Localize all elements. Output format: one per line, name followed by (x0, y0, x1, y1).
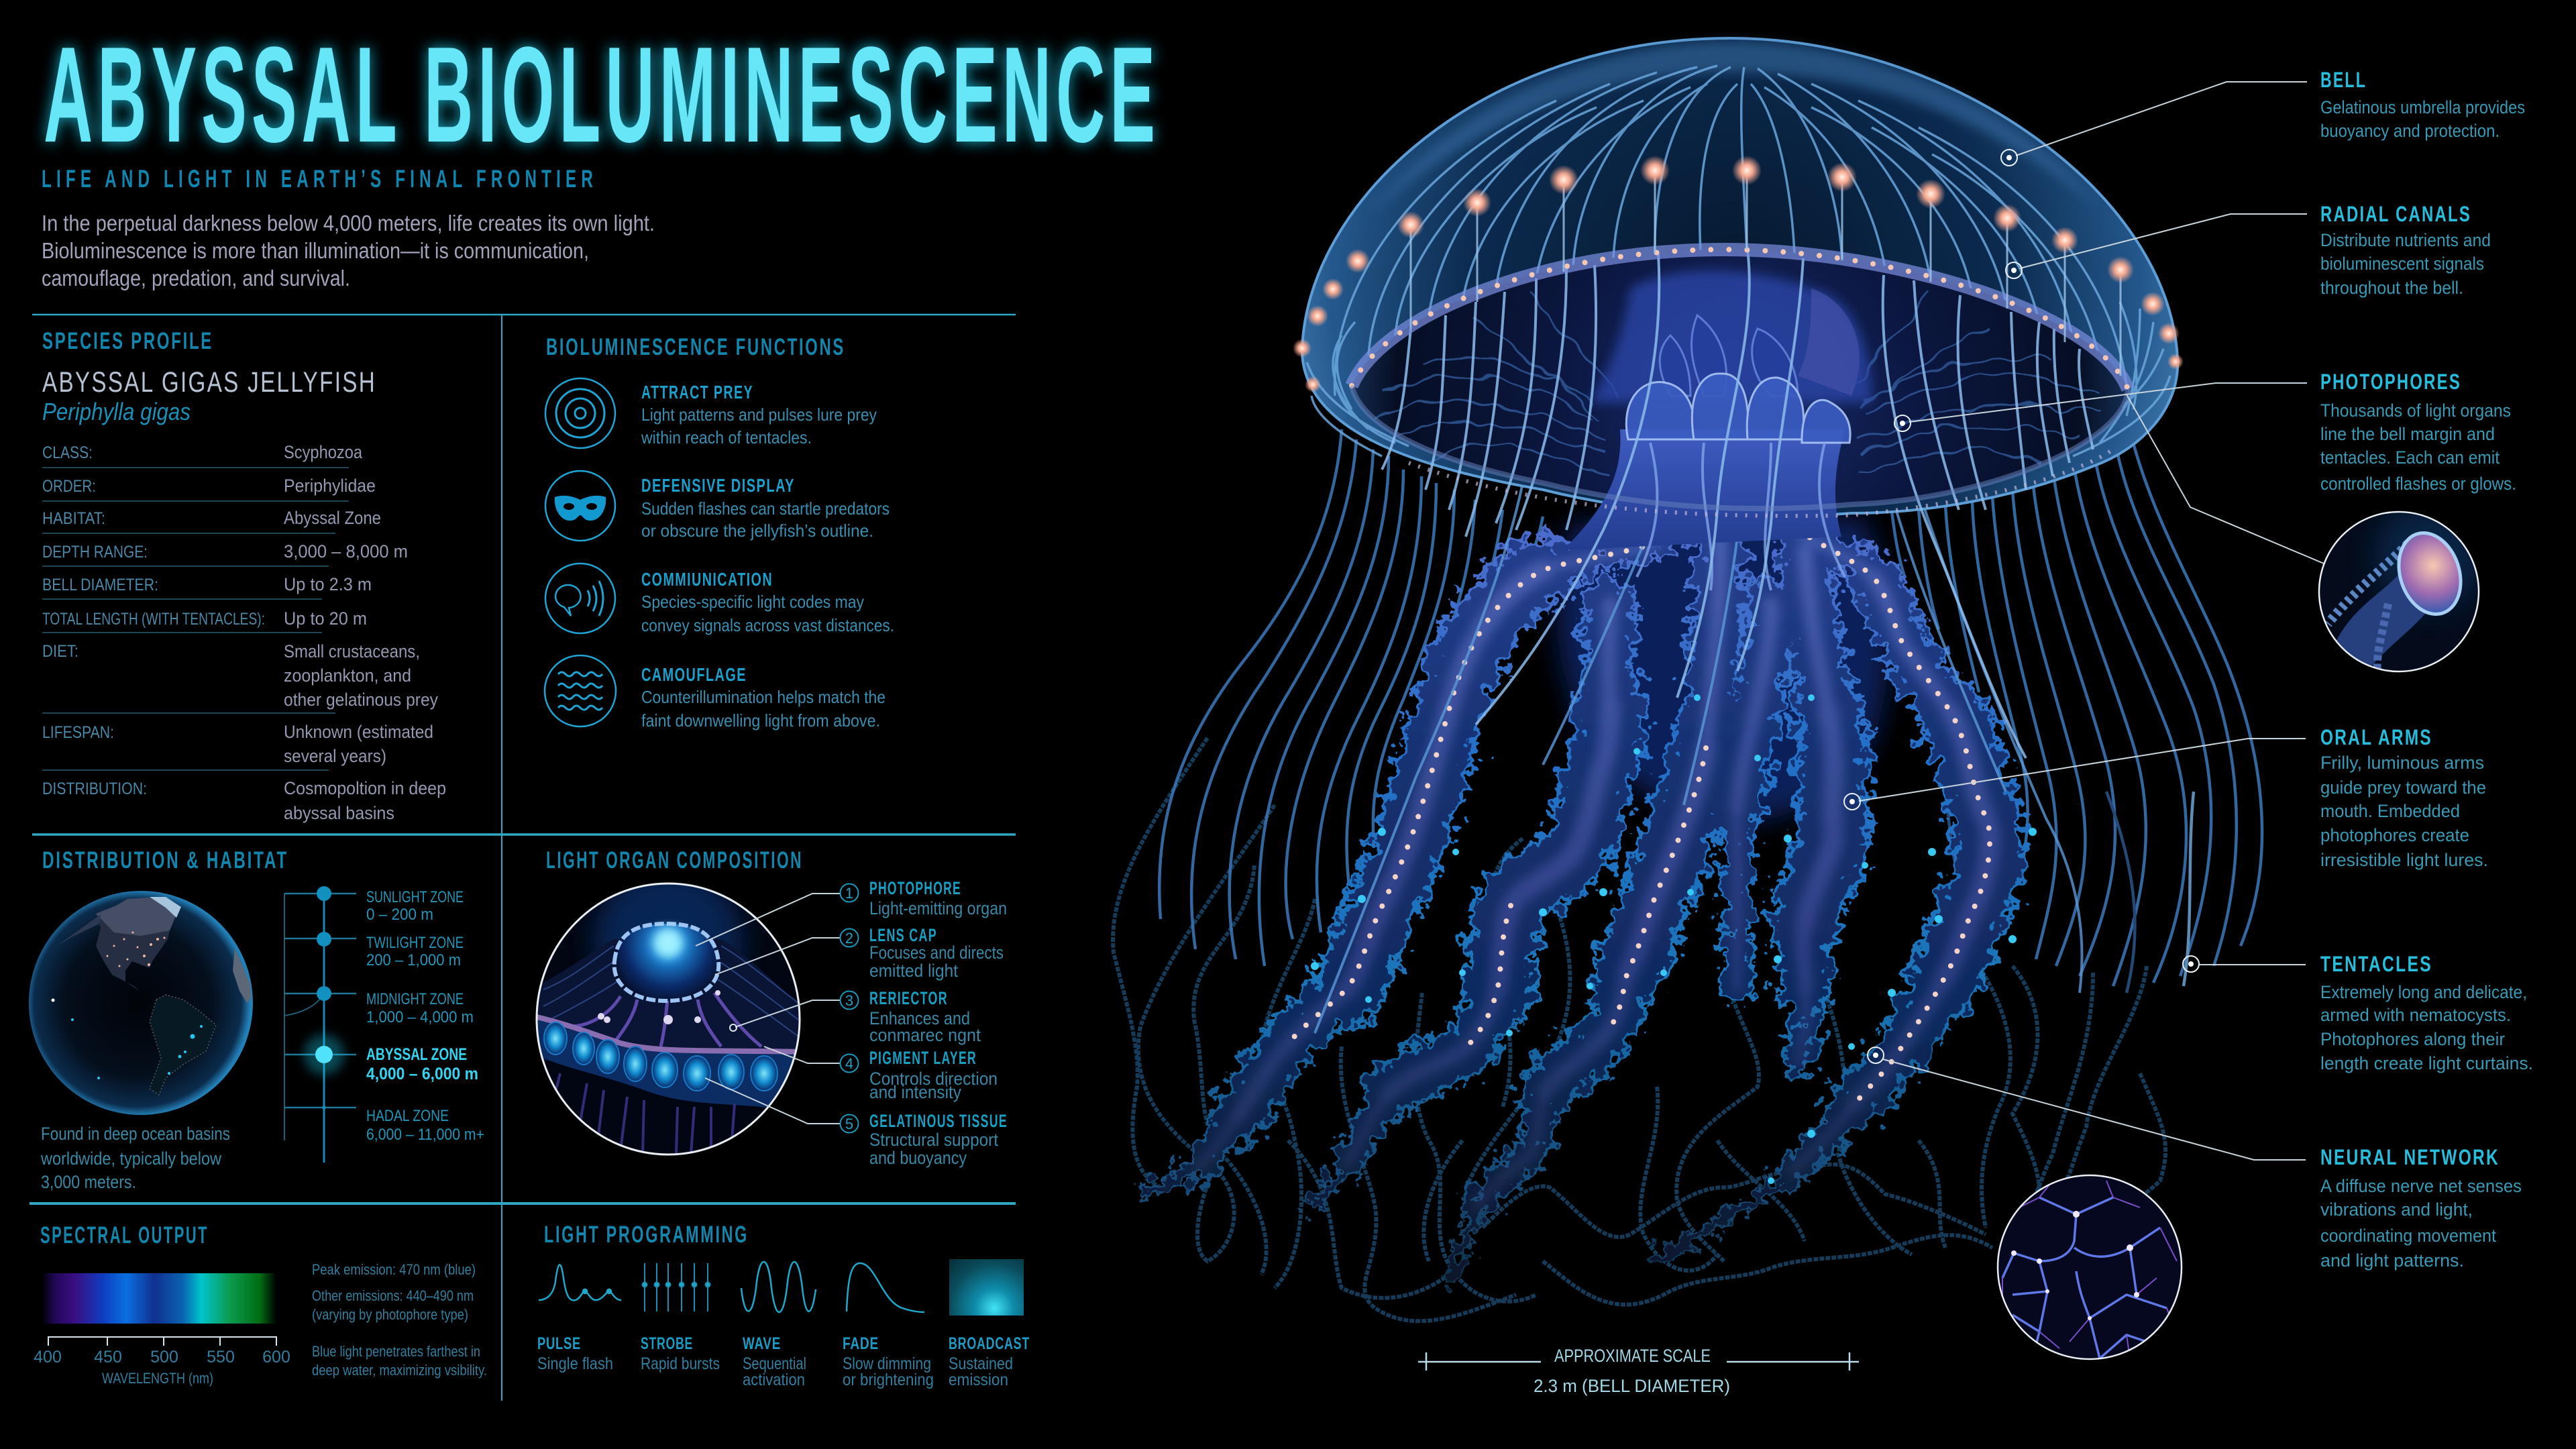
pattern labels: Slow dimming (843, 1354, 931, 1373)
text: attract prey (641, 382, 877, 447)
profile table: TOTAL LENGTH (WITH TENTACLES): (42, 610, 265, 629)
oral arms frill layers (1148, 510, 1990, 1281)
icon: camouflage waves (545, 655, 616, 727)
callout: photophores (1894, 370, 2516, 564)
profile table: BELL DIAMETER: (42, 576, 158, 594)
profile table: DISTRIBUTION: (42, 780, 147, 798)
organ part labels: Controls direction (869, 1069, 998, 1089)
pattern: pulse (539, 1265, 621, 1300)
icon: attract prey (545, 378, 615, 448)
outer tentacles (1159, 416, 2262, 993)
organ callout leaders and numbers: 1 (845, 885, 853, 902)
callout: tentacles: armed with nematocysts. (2320, 1005, 2511, 1025)
text: communication: COMMIUNICATION (641, 569, 773, 590)
pattern labels: Single flash (537, 1354, 613, 1373)
wavelength axis: 600 (262, 1348, 290, 1366)
bell margin ring (1352, 250, 2128, 516)
pattern labels: FADE (843, 1334, 879, 1353)
callout: bell: buoyancy and protection. (2320, 121, 2500, 141)
lower beaded tentacles (1113, 738, 2165, 1321)
depth zone scale: ABYSSAL ZONE (366, 1045, 467, 1064)
callout: radial canals: throughout the bell. (2320, 278, 2463, 298)
depth zone scale (284, 886, 484, 1163)
organ callout leaders and numbers: 3 (845, 992, 853, 1009)
callout: neural network: coordinating movement (2320, 1226, 2496, 1246)
callout: radial canals (2006, 202, 2491, 298)
callout: tentacles (2183, 952, 2533, 1073)
callout: tentacles: Photophores along their (2320, 1029, 2505, 1049)
wavelength axis: 550 (207, 1348, 235, 1366)
text: camouflage (641, 664, 885, 731)
profile table: ORDER: (42, 477, 96, 496)
callout: tentacles: Extremely long and delicate, (2320, 982, 2527, 1002)
intro text: In the perpetual darkness below 4,000 meters, life creates its own light. (42, 211, 655, 235)
organ callout leaders and numbers: 2 (845, 930, 853, 947)
pattern labels (537, 1334, 1030, 1389)
intro text: camouflage, predation, and survival. (42, 266, 350, 290)
bell photophores (1293, 156, 2184, 392)
organ callout leaders and numbers: 5 (845, 1116, 853, 1132)
organ callout leaders and numbers: 4 (845, 1055, 853, 1072)
profile table: Cosmopoltion in deep (284, 778, 446, 798)
wavelength axis: 400 (34, 1348, 62, 1366)
depth zone scale: 1,000 – 4,000 m (366, 1008, 474, 1026)
text: defensive display: or obscure the jellyfish’s outline. (641, 521, 873, 541)
subumbrella (1352, 250, 2128, 508)
organ part labels (869, 878, 1008, 1168)
organ part labels: Structural support (869, 1130, 998, 1150)
callout: oral arms: guide prey toward the (2320, 777, 2486, 798)
callout: neural network: NEURAL NETWORK (2320, 1145, 2500, 1169)
text: attract prey: within reach of tentacles. (641, 427, 812, 447)
scale bar (1418, 1346, 1859, 1396)
heading: light programming: LIGHT PROGRAMMING (544, 1222, 749, 1248)
organ part labels: and intensity (869, 1082, 961, 1102)
depth zone scale: MIDNIGHT ZONE (366, 990, 464, 1008)
spectral notes: Other emissions: 440–490 nm (312, 1287, 474, 1304)
profile table: HABITAT: (42, 509, 105, 528)
pattern labels: BROADCAST (949, 1334, 1030, 1353)
spectrum bar (42, 1273, 276, 1324)
profile table (42, 442, 446, 823)
organ part labels: PHOTOPHORE (869, 878, 961, 898)
organ part labels: GELATINOUS TISSUE (869, 1111, 1008, 1131)
pattern labels: activation (743, 1371, 805, 1389)
profile table: Small crustaceans, (284, 641, 420, 661)
heading: light organ: LIGHT ORGAN COMPOSITION (546, 847, 803, 873)
text: camouflage: Counterillumination helps match the (641, 687, 885, 707)
long hanging tentacles in front of arms (1315, 470, 2082, 1033)
radial canals (1307, 66, 2170, 456)
pattern: broadcast (949, 1259, 1024, 1316)
callout: neural network: A diffuse nerve net senses (2320, 1176, 2522, 1196)
text: ABYSSAL BIOLUMINESCENCE (44, 19, 1160, 171)
organ callout leaders and numbers (696, 884, 859, 1132)
callout: photophores: PHOTOPHORES (2320, 370, 2461, 394)
distribution note: 3,000 meters. (41, 1172, 136, 1192)
spectral notes: (varying by photophore type) (312, 1306, 468, 1323)
callout: bell: Gelatinous umbrella provides (2320, 97, 2525, 117)
pattern: fade (847, 1263, 924, 1312)
profile table: CLASS: (42, 443, 93, 462)
panel: distribution and habitat (29, 847, 484, 1192)
subtitle: LIFE AND LIGHT IN EARTH’S FINAL FRONTIER (42, 165, 598, 193)
callout: oral arms: irresistible light lures. (2320, 850, 2488, 870)
panel: spectral output (34, 1222, 487, 1387)
profile table: Up to 20 m (284, 608, 367, 629)
profile table: other gelatinous prey (284, 690, 438, 710)
spectral notes: Peak emission: 470 nm (blue) (312, 1261, 476, 1278)
pattern labels: WAVE (743, 1334, 781, 1353)
text: attract prey: ATTRACT PREY (641, 382, 753, 402)
heading: functions: BIOLUMINESCENCE FUNCTIONS (546, 334, 845, 360)
distribution note: worldwide, typically below (40, 1148, 221, 1169)
callout: oral arms (1844, 725, 2488, 870)
globe (29, 891, 253, 1115)
icon: defensive display mask (545, 471, 615, 541)
pattern labels: Sustained (949, 1354, 1013, 1373)
pattern labels: Sequential (743, 1354, 806, 1373)
organ part labels: and buoyancy (869, 1148, 967, 1168)
pattern labels: emission (949, 1371, 1008, 1389)
pattern: wave (741, 1262, 816, 1312)
oral arm pearls and glints (1285, 519, 2037, 1184)
callout: tentacles: TENTACLES (2320, 952, 2432, 976)
pattern labels: Rapid bursts (641, 1354, 720, 1373)
text: defensive display: Sudden flashes can startle predators (641, 498, 890, 519)
text: defensive display (641, 475, 890, 541)
callout: oral arms: ORAL ARMS (2320, 725, 2432, 749)
panel: species profile (42, 328, 446, 823)
depth zone scale: 0 – 200 m (366, 906, 433, 924)
profile table: Scyphozoa (284, 442, 363, 462)
text: attract prey: Light patterns and pulses lure prey (641, 405, 877, 425)
profile table: DIET: (42, 642, 78, 661)
callout: neural network (1868, 1047, 2522, 1271)
spectral notes: deep water, maximizing vsibility. (312, 1362, 487, 1379)
species name: ABYSSAL GIGAS JELLYFISH (42, 366, 376, 398)
text: camouflage: CAMOUFLAGE (641, 664, 747, 685)
depth zone scale: 200 – 1,000 m (366, 951, 461, 969)
text: communication: Species-specific light codes may (641, 592, 864, 612)
callout: tentacles: length create light curtains. (2320, 1053, 2533, 1073)
depth zone scale: 6,000 – 11,000 m+ (366, 1126, 484, 1144)
callout: bell: BELL (2320, 68, 2367, 92)
central arm curtain (1557, 517, 1888, 821)
callout: photophores: controlled flashes or glows. (2320, 474, 2516, 494)
text: communication: convey signals across vast distances. (641, 615, 894, 635)
wavelength axis (34, 1337, 290, 1387)
scale bar: APPROXIMATE SCALE (1554, 1346, 1711, 1366)
callout: oral arms: Frilly, luminous arms (2320, 753, 2484, 773)
panel: light organ composition (534, 847, 1008, 1168)
rim tentacles through the bell (1382, 250, 2093, 758)
depth zone scale: TWILIGHT ZONE (366, 934, 464, 952)
pattern labels: or brightening (843, 1371, 934, 1389)
subumbrella folds (1375, 295, 2106, 476)
organ part labels: PIGMENT LAYER (869, 1048, 977, 1068)
organ cross-section (534, 865, 802, 1155)
text: defensive display: DEFENSIVE DISPLAY (641, 475, 795, 496)
text: communication (641, 569, 894, 635)
distribution note: Found in deep ocean basins (41, 1124, 230, 1144)
pattern: strobe (643, 1263, 710, 1311)
organ part labels: LENS CAP (869, 925, 937, 945)
profile table: Up to 2.3 m (284, 574, 372, 594)
heading: species profile: SPECIES PROFILE (42, 328, 213, 354)
depth zone scale: 4,000 – 6,000 m (366, 1065, 478, 1083)
wavelength axis: WAVELENGTH (nm) (102, 1370, 213, 1387)
organ part labels: Enhances and (869, 1008, 970, 1028)
profile table: Abyssal Zone (284, 508, 381, 528)
callout: photophores: Thousands of light organs (2320, 400, 2511, 421)
dome hazy top (1368, 42, 2100, 215)
wavelength axis: 500 (150, 1348, 178, 1366)
organ part labels: emitted light (869, 961, 958, 981)
wavelength axis: 450 (94, 1348, 122, 1366)
heading: distribution: DISTRIBUTION & HABITAT (42, 847, 288, 873)
scientific name: Periphylla gigas (42, 398, 191, 425)
profile table: DEPTH RANGE: (42, 543, 148, 561)
bell dome (1302, 38, 2178, 517)
profile table: Periphylidae (284, 476, 376, 496)
panel: light programming (537, 1222, 1030, 1389)
intro text (42, 211, 655, 290)
callout: photophores: line the bell margin and (2320, 424, 2495, 444)
pattern labels: STROBE (641, 1334, 693, 1353)
callout: neural network: and light patterns. (2320, 1250, 2464, 1271)
profile table: LIFESPAN: (42, 723, 114, 742)
intro text: Bioluminescence is more than illumination—it is communication, (42, 238, 589, 263)
organ part labels: RERIECTOR (869, 988, 948, 1008)
inset: neural network (1998, 1175, 2182, 1359)
organ part labels: Focuses and directs (869, 943, 1004, 963)
jellyfish illustration (1113, 38, 2262, 1321)
profile table: Unknown (estimated (284, 722, 433, 742)
panel: bioluminescence functions (545, 334, 894, 731)
profile table: 3,000 – 8,000 m (284, 541, 408, 561)
stomach and manubrium (1563, 271, 1872, 590)
oral arm midribs (1196, 510, 1990, 1208)
profile table: zooplankton, and (284, 665, 411, 686)
callout: radial canals: Distribute nutrients and (2320, 230, 2491, 250)
depth zone scale: HADAL ZONE (366, 1107, 449, 1125)
callout: oral arms: photophores create (2320, 825, 2469, 845)
scale bar: 2.3 m (BELL DIAMETER) (1534, 1376, 1730, 1396)
profile table: several years) (284, 746, 386, 766)
icon: communication (545, 564, 615, 633)
inset: photophore detail (2319, 503, 2482, 678)
callout: neural network: vibrations and light, (2320, 1199, 2473, 1220)
depth zone scale: SUNLIGHT ZONE (366, 888, 464, 906)
callout: radial canals: bioluminescent signals (2320, 254, 2484, 274)
callout: oral arms: mouth. Embedded (2320, 801, 2460, 821)
profile table: abyssal basins (284, 803, 394, 823)
text: camouflage: faint downwelling light from above. (641, 710, 880, 731)
distribution note (40, 1124, 230, 1192)
callout: photophores: tentacles. Each can emit (2320, 447, 2500, 468)
organ part labels: conmarec ngnt (869, 1025, 981, 1045)
spectral notes (312, 1261, 487, 1379)
callout: radial canals: RADIAL CANALS (2320, 202, 2471, 226)
organ part labels: Light-emitting organ (869, 898, 1007, 918)
spectral notes: Blue light penetrates farthest in (312, 1343, 480, 1360)
callout: bell (2001, 68, 2525, 166)
pattern labels: PULSE (537, 1334, 581, 1353)
heading: spectral: SPECTRAL OUTPUT (40, 1222, 209, 1248)
